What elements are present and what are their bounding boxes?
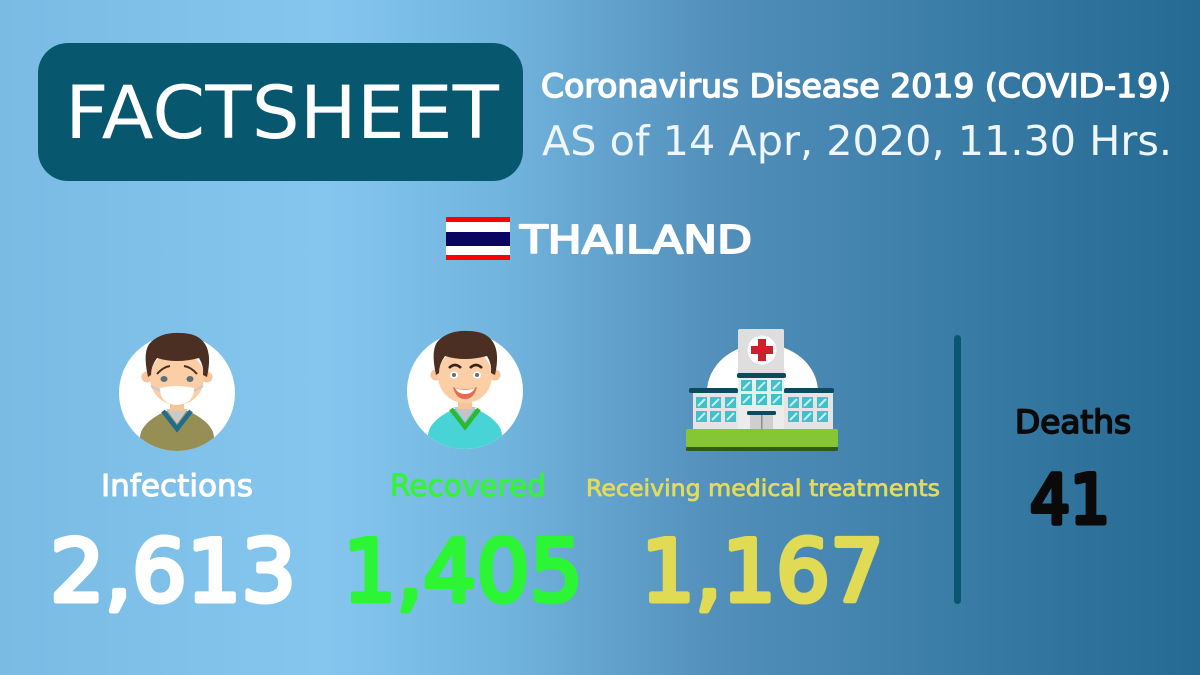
number: deaths: 41 [1030,461,1110,540]
number: receiving medical treatments: 1,167 [641,522,884,622]
divider [954,335,961,604]
number: recovered: 1,405 [343,522,583,622]
factsheet badge [38,43,523,181]
icon: recovered smiling person [407,331,523,453]
label: recovered: Recovered [390,469,546,504]
number: infections: 2,613 [50,522,296,622]
label: infections: Infections [101,469,253,504]
heading: disease name: Coronavirus Disease 2019 (COVID-19) [541,67,1171,105]
label: receiving medical treatments: Receiving medical treatments [586,476,940,502]
icon: Thailand flag [446,217,510,260]
heading: date: AS of 14 Apr, 2020, 11.30 Hrs. [542,117,1172,165]
icon: hospital [686,329,838,451]
icon: infected person with mask [119,333,235,455]
country name: THAILAND [519,218,752,262]
label: deaths: Deaths [1015,403,1131,441]
factsheet badge: FACTSHEET [65,71,499,156]
